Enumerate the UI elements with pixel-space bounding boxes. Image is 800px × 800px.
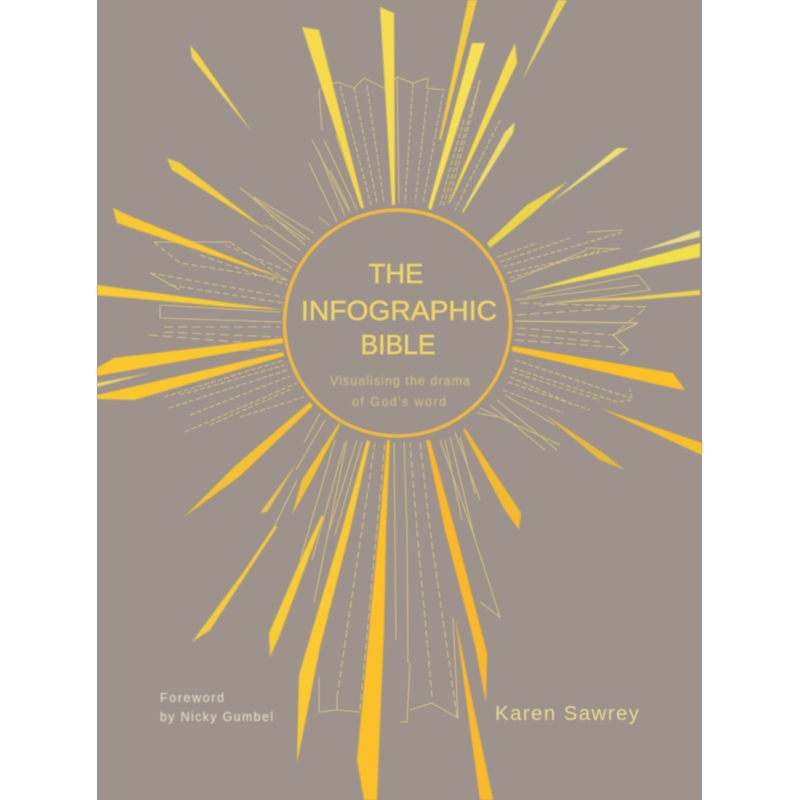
foreword line 2: by Nicky Gumbel: [160, 710, 273, 724]
ray: north west: [167, 158, 267, 230]
subtitle line 1: Visualising the drama: [330, 374, 470, 388]
foreword credit: [160, 691, 273, 724]
ray: south left long: [297, 440, 370, 763]
ray: west thin: [97, 373, 150, 387]
ray: east thin: [637, 230, 700, 252]
ray: east lower thin: [545, 290, 700, 302]
foreword line 1: Foreword: [160, 691, 224, 705]
ray: east south east: [512, 346, 685, 390]
ray: north: [380, 7, 395, 205]
ray: south west: [184, 402, 313, 517]
subtitle line 2: of God's word: [352, 395, 446, 409]
ray: south east edge: [600, 408, 702, 455]
ray: south west small: [269, 515, 324, 657]
sunburst rays: [97, 0, 702, 800]
ray: south south east: [463, 430, 521, 530]
ray: west upper: [97, 285, 285, 310]
ray: south south west: [292, 423, 340, 515]
ray: east wide: [520, 243, 700, 293]
ray: west wide: [97, 338, 283, 376]
ray: south west thin: [260, 463, 297, 513]
ray: west north west: [113, 208, 287, 280]
title line 3: BIBLE: [360, 329, 436, 360]
author name: Karen Sawrey: [495, 702, 640, 725]
ray: top edge thin: [439, 0, 477, 140]
ray: north east wide: [449, 43, 517, 203]
ray: south center: [357, 440, 390, 800]
ray: top right thin: [522, 0, 567, 80]
ray: south west lower: [192, 525, 277, 642]
medallion ring: [284, 210, 510, 436]
ray: east north east tip: [550, 148, 628, 203]
ray: south bottom edge: [455, 617, 493, 800]
ray: north east short: [462, 122, 515, 213]
title medallion: [284, 210, 510, 436]
ray: west lower wide: [97, 352, 284, 400]
title: [301, 258, 497, 360]
ray: east north east: [487, 182, 567, 248]
title line 2: INFOGRAPHIC: [301, 295, 497, 326]
ray: south east small: [543, 413, 625, 470]
ray: north north east: [428, 43, 485, 210]
ray: north north west: [302, 27, 364, 208]
ray: upper left thin: [190, 45, 252, 132]
cover background: [97, 0, 702, 800]
title line 1: THE: [368, 258, 424, 289]
subtitle: [330, 374, 470, 409]
open book line art: [149, 77, 650, 722]
ray: south long right: [426, 440, 487, 703]
